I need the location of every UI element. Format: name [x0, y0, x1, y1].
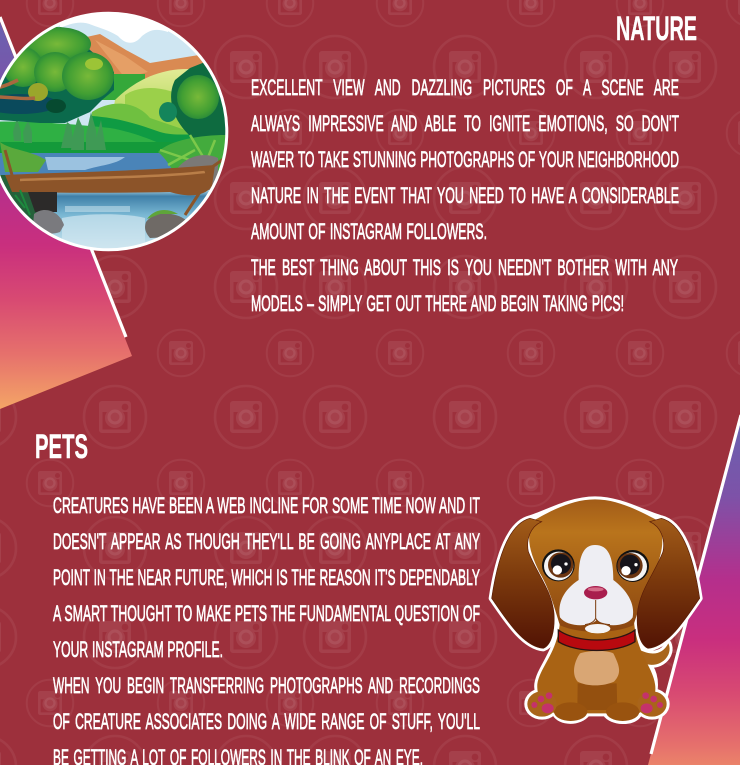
text block: nature [251, 75, 679, 316]
illustration: puppy [492, 499, 700, 721]
gradient triangle: top left [0, 17, 132, 409]
heading: pets: PETS [35, 428, 88, 466]
text block: pets [53, 493, 480, 765]
text block: nature: AMOUNT OF INSTAGRAM FOLLOWERS. [251, 219, 487, 244]
gradient triangle: bottom right [648, 415, 740, 765]
text block: pets: YOUR INSTAGRAM PROFILE. [53, 637, 223, 662]
illustration: nature landscape in circle [0, 12, 230, 252]
